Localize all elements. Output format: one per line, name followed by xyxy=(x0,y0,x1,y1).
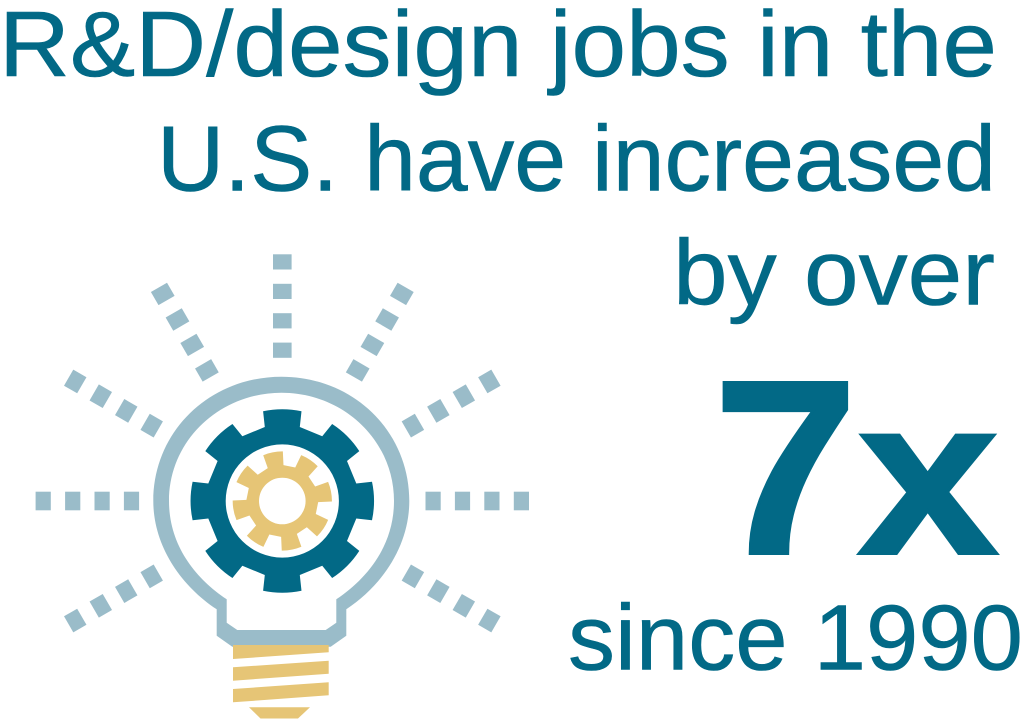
icon: light bulb with gears xyxy=(36,254,529,719)
heading line 3: by over xyxy=(673,221,995,325)
small gear xyxy=(224,443,340,559)
heading: R&D/design jobs in the U.S. have increased by over xyxy=(0,0,997,325)
big figure: 7x: 7 xyxy=(713,328,858,606)
big figure: 7x: x xyxy=(858,352,998,602)
bulb screw base xyxy=(233,645,329,718)
caption: since 1990: since 1990 xyxy=(568,585,1023,689)
light rays xyxy=(36,254,529,632)
large gear xyxy=(191,409,374,593)
big figure: 7x xyxy=(713,328,998,606)
bulb outline xyxy=(153,377,409,647)
heading line 2: U.S. have increased xyxy=(157,106,996,210)
